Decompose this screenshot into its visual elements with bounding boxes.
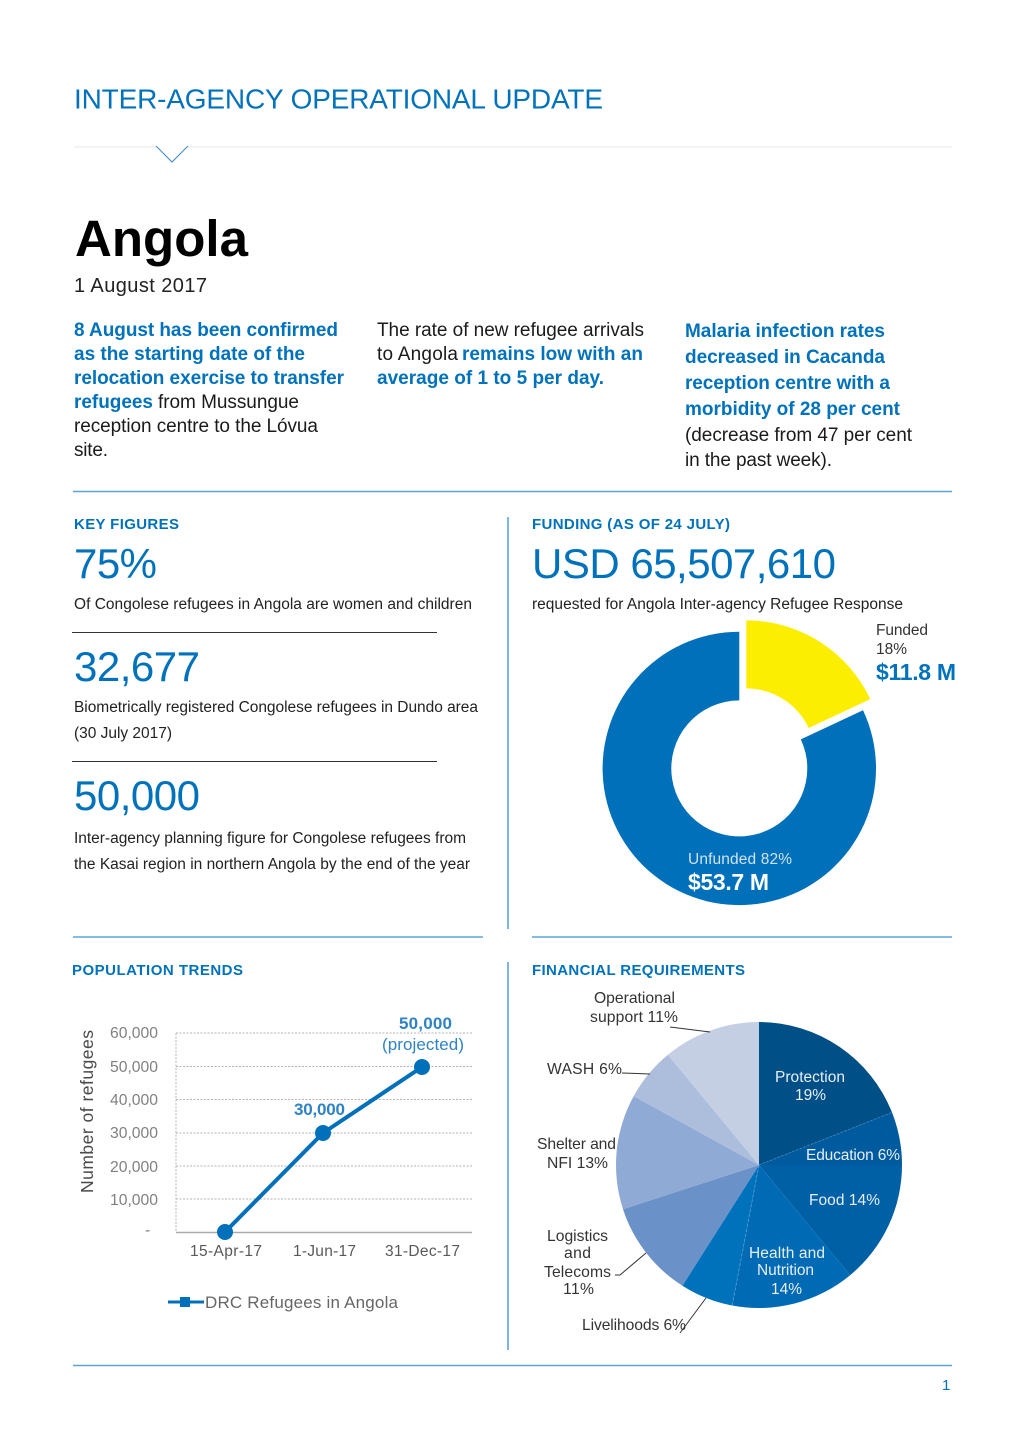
highlight column 2: average of 1 to 5 per day. (377, 368, 604, 389)
outer labels: Livelihoods 6% (582, 1317, 686, 1334)
y axis labels (110, 1025, 158, 1239)
line chart (77, 1014, 472, 1312)
inner labels: Protection (775, 1069, 845, 1086)
donut chart: funding (603, 620, 876, 905)
slice: shelter (616, 1096, 759, 1209)
leader lines (615, 1027, 710, 1333)
slice: unfunded (603, 632, 876, 905)
panel: key figures (72, 516, 478, 873)
highlight column 2: The rate of new refugee arrivals (377, 320, 644, 341)
funding total: USD 65,507,610 (532, 540, 836, 587)
highlight column 3: decreased in Cacanda (685, 347, 885, 368)
y axis labels: 10,000 (110, 1192, 158, 1209)
y axis labels: 30,000 (110, 1125, 158, 1142)
heading: key figures: KEY FIGURES (74, 516, 179, 533)
highlight column 2: remains low with an (462, 344, 643, 365)
y axis labels: - (145, 1222, 150, 1239)
date: 1 August 2017 (74, 275, 207, 297)
data labels: 30,000 (294, 1100, 345, 1119)
inner labels (749, 1069, 900, 1298)
highlight column 3 (685, 321, 913, 471)
panel: population trends (72, 962, 472, 1312)
outer labels: 11% (563, 1281, 594, 1298)
inner labels: Health and (749, 1245, 825, 1262)
data line (217, 1059, 430, 1240)
header title: INTER-AGENCY OPERATIONAL UPDATE (74, 84, 603, 114)
label: unfunded: Unfunded 82% (688, 851, 792, 868)
outer labels: and (564, 1245, 591, 1262)
figure: 75%: Of Congolese refugees in Angola are women and children (74, 596, 472, 613)
slice: food (759, 1165, 902, 1275)
outer labels: support 11% (590, 1009, 678, 1026)
outer labels: Shelter and (537, 1136, 616, 1153)
inner labels: Education 6% (806, 1147, 900, 1164)
highlight column 2 (377, 320, 644, 389)
slice: logistics (623, 1165, 759, 1286)
slice: health and nutrition (732, 1165, 850, 1308)
outer labels: WASH 6% (547, 1061, 622, 1078)
page number: 1 (942, 1377, 950, 1394)
highlight column 3: (decrease from 47 per cent (685, 425, 913, 446)
highlight column 2: to Angola (377, 344, 458, 365)
highlight column 3: reception centre with a (685, 373, 890, 394)
highlight column 1: relocation exercise to transfer (74, 368, 345, 389)
highlight column 1 (74, 320, 345, 461)
data labels: 50,000 (399, 1014, 452, 1033)
x axis labels: 15-Apr-17 (190, 1243, 262, 1260)
label: unfunded (688, 851, 792, 895)
highlight column 3: morbidity of 28 per cent (685, 399, 901, 420)
heading: financial requirements: FINANCIAL REQUIREMENTS (532, 962, 745, 979)
slice: education (759, 1112, 902, 1165)
title block (74, 210, 249, 297)
inner labels: 14% (771, 1281, 802, 1298)
legend: DRC Refugees in Angola (205, 1293, 399, 1312)
highlight column 1: as the starting date of the (74, 344, 305, 365)
figure: 32,677: (30 July 2017) (74, 725, 172, 742)
icon: chevron marker (156, 146, 188, 162)
figure: 32,677: 32,677 (74, 643, 200, 690)
y axis labels: 50,000 (110, 1059, 158, 1076)
slice: funded (746, 620, 870, 728)
label: funded: $11.8 M (876, 659, 956, 685)
highlight column 1: site. (74, 440, 108, 461)
figure: 50,000: Inter-agency planning figure for Congolese refugees from (74, 830, 466, 847)
figure: 32,677 (74, 643, 478, 742)
inner labels: 19% (795, 1087, 826, 1104)
slice: operational support (668, 1022, 759, 1165)
highlight column 3: in the past week). (685, 450, 832, 471)
heading: funding: FUNDING (AS OF 24 JULY) (532, 516, 730, 533)
inner labels: Nutrition (757, 1262, 814, 1279)
slice: wash (634, 1055, 759, 1165)
highlight column 1: refugees (74, 392, 153, 413)
slice: protection (759, 1022, 892, 1165)
label: funded: Funded (876, 622, 928, 639)
figure: 50,000: 50,000 (74, 772, 200, 819)
highlight column 3: Malaria infection rates (685, 321, 885, 342)
funding description: requested for Angola Inter-agency Refugee Response (532, 596, 903, 613)
y axis title: Number of refugees (77, 1030, 97, 1193)
y axis labels: 60,000 (110, 1025, 158, 1042)
data labels (294, 1014, 464, 1119)
x axis labels: 31-Dec-17 (385, 1243, 460, 1260)
slice: livelihoods (682, 1165, 759, 1306)
label: unfunded: $53.7 M (688, 869, 769, 895)
label: funded (876, 622, 956, 685)
x axis labels (190, 1243, 460, 1260)
heading: population trends: POPULATION TRENDS (72, 962, 243, 979)
figure: 32,677: Biometrically registered Congolese refugees in Dundo area (74, 699, 478, 716)
outer labels: NFI 13% (547, 1155, 608, 1172)
highlight column 1: reception centre to the Lóvua (74, 416, 318, 437)
figure: 75%: 75% (74, 540, 157, 587)
highlight column 1: 8 August has been confirmed (74, 320, 338, 341)
figure: 50,000: the Kasai region in northern Angola by the end of the year (74, 856, 470, 873)
highlight column 1: from Mussungue (158, 392, 299, 413)
inner labels: Food 14% (809, 1192, 880, 1209)
header band (74, 84, 952, 162)
y axis labels: 20,000 (110, 1159, 158, 1176)
outer labels (537, 990, 686, 1334)
y axis labels: 40,000 (110, 1092, 158, 1109)
data labels: (projected) (382, 1035, 464, 1054)
x axis labels: 1-Jun-17 (293, 1243, 356, 1260)
label: funded: 18% (876, 641, 907, 658)
panel: financial requirements (532, 962, 902, 1334)
panel: funding (532, 516, 956, 905)
outer labels: Logistics (547, 1228, 608, 1245)
figure: 50,000 (74, 772, 470, 873)
country title: Angola (75, 210, 249, 267)
figure: 75% (74, 540, 472, 613)
outer labels: Operational (594, 990, 675, 1007)
outer labels: Telecoms (544, 1264, 611, 1281)
pie chart (537, 990, 902, 1334)
